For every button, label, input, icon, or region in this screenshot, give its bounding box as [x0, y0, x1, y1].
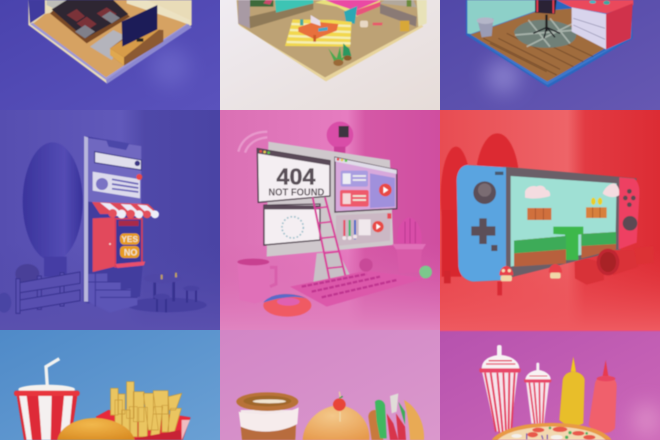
left joy-con [457, 165, 506, 282]
plants [328, 43, 352, 66]
panel: drinks and pizza on magenta [440, 330, 660, 440]
cafe table and stools [144, 273, 199, 312]
sign: no: NO [124, 247, 137, 257]
sign: yes: YES [121, 234, 138, 244]
rug [514, 20, 576, 48]
panel: burger and fries on blue [0, 330, 220, 440]
clouds [525, 186, 550, 199]
window: profile and video [335, 157, 397, 212]
round bun with cherry pick [303, 392, 369, 440]
pizza [492, 423, 612, 440]
bed [325, 0, 381, 24]
coffee cup [236, 392, 299, 440]
window: 404 not found: 404 [277, 164, 315, 190]
window [115, 219, 142, 267]
sandwich with lettuce [368, 393, 424, 440]
bricks [527, 208, 551, 220]
console body [503, 167, 637, 278]
chair [533, 0, 560, 38]
ladder [313, 197, 347, 288]
burger bun [57, 418, 135, 440]
icon: wifi arc [238, 132, 267, 153]
search bar [95, 152, 141, 170]
sign: no [120, 246, 139, 258]
icon: egg-shaped tree [15, 142, 83, 284]
panel: coffee and sandwich on mauve [220, 330, 440, 440]
webcam [327, 122, 353, 154]
ground blocks [514, 236, 566, 267]
monitor [267, 142, 393, 257]
panel: 404 monitor on pink [220, 110, 440, 330]
red domes [441, 133, 519, 247]
pipe [553, 227, 583, 260]
figures [497, 281, 502, 295]
keyboard [290, 271, 425, 307]
bin [477, 17, 494, 37]
window: 404 not found: NOT FOUND [268, 187, 324, 198]
rug [285, 19, 352, 47]
window: loading [264, 204, 320, 245]
panel: online shop phone on indigo [0, 110, 220, 330]
right joy-con [619, 177, 639, 249]
coffee table [298, 15, 338, 42]
message card [93, 172, 140, 198]
inflatable ring [263, 294, 311, 317]
fries carton [96, 382, 191, 440]
door [93, 217, 115, 272]
fence [16, 272, 80, 313]
TV stand [110, 28, 163, 66]
bed [47, 0, 128, 38]
awning [92, 202, 159, 218]
panel: isometric bedroom on violet [0, 0, 220, 110]
dresser [380, 0, 417, 31]
soda cup [14, 359, 80, 440]
desk [557, 0, 633, 49]
ketchup bottle [589, 360, 617, 433]
window: controls [336, 213, 391, 246]
game screen [511, 176, 620, 267]
panel: isometric office on purple [440, 0, 660, 110]
phone [83, 136, 159, 303]
TV [122, 5, 157, 47]
cactus pot [392, 217, 426, 273]
window: 404 not found [257, 149, 330, 202]
panel: game console on red [440, 110, 660, 330]
monitor stand [313, 252, 352, 282]
small striped cup [524, 363, 551, 423]
red crate [575, 258, 604, 285]
mug [237, 259, 276, 303]
red cannon [597, 249, 639, 275]
mustard bottle [559, 357, 585, 426]
mushrooms [499, 264, 562, 281]
stairs [88, 273, 137, 313]
large striped cup [479, 345, 521, 433]
panel: isometric room on pale background [220, 0, 440, 110]
